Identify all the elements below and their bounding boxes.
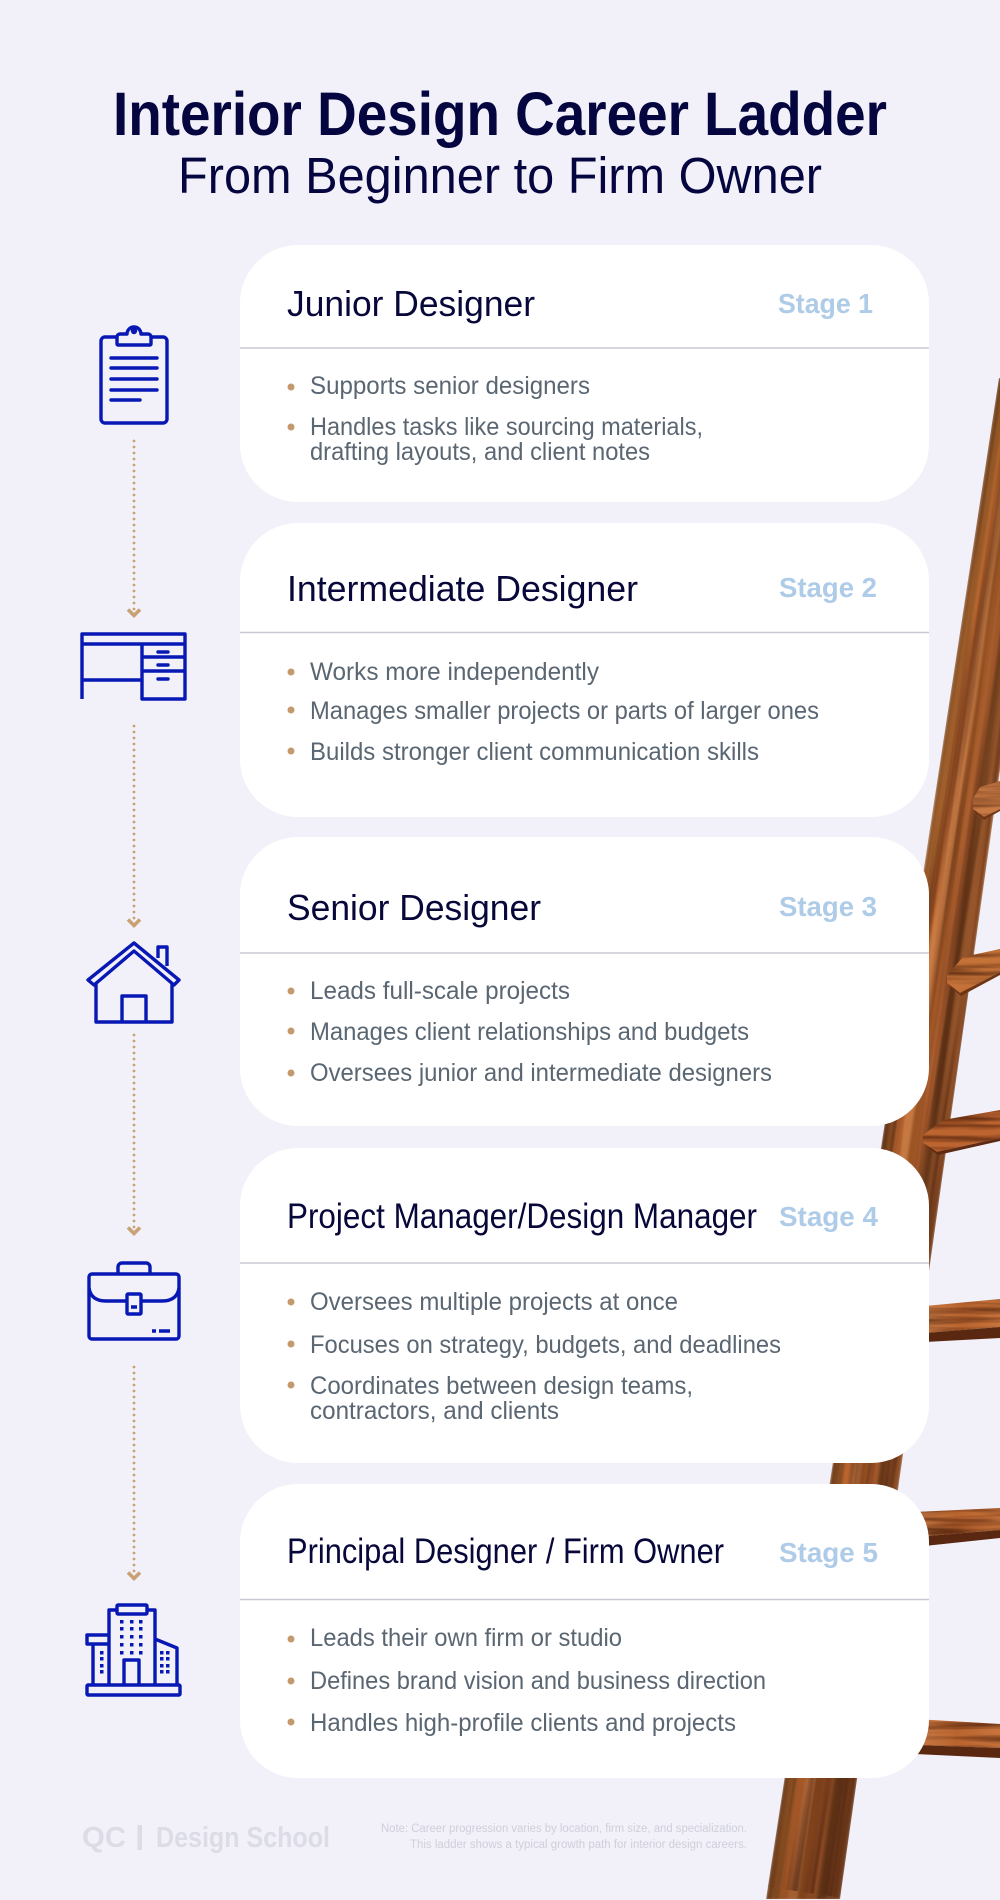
- bullet list: Manages client relationships and budgets: [310, 1018, 749, 1046]
- icon: briefcase: [89, 1263, 179, 1339]
- bullet list: Works more independently: [310, 658, 599, 686]
- title: [113, 80, 887, 204]
- bullet list: [288, 1288, 781, 1425]
- panel: stage 3 senior designer: [240, 837, 929, 1126]
- bullet list: drafting layouts, and client notes: [310, 438, 650, 466]
- bullet list: Handles tasks like sourcing materials,: [310, 413, 703, 441]
- bullet list: Coordinates between design teams,: [310, 1372, 693, 1400]
- panel: stage 5 principal designer: [240, 1484, 929, 1778]
- arrow: stage 2 to stage 3: [128, 726, 140, 926]
- bullet list: [288, 1624, 766, 1737]
- logo: QC Design School: [82, 1822, 330, 1854]
- panel: stage 4 project manager: [240, 1148, 929, 1463]
- card heading: Principal Designer / Firm Owner: [287, 1532, 724, 1571]
- stage label: Stage 2: [779, 572, 877, 603]
- arrow: stage 1 to stage 2: [128, 441, 140, 616]
- subheading: From Beginner to Firm Owner: [178, 147, 822, 204]
- bullet list: Leads their own firm or studio: [310, 1624, 622, 1652]
- main heading: Interior Design Career Ladder: [113, 80, 887, 148]
- bullet list: [288, 372, 703, 466]
- bullet list: [288, 977, 772, 1087]
- panel: stage 1 junior designer: [240, 245, 929, 502]
- stage label: Stage 4: [779, 1201, 879, 1232]
- bullet list: Leads full-scale projects: [310, 977, 570, 1005]
- bullet list: Oversees junior and intermediate designers: [310, 1059, 772, 1087]
- ladder illustration: [766, 378, 1000, 1899]
- bullet list: contractors, and clients: [310, 1397, 559, 1425]
- icon: house: [88, 943, 179, 1022]
- bullet list: Oversees multiple projects at once: [310, 1288, 678, 1316]
- card heading: Project Manager/Design Manager: [287, 1197, 757, 1236]
- panel: stage 2 intermediate designer: [240, 523, 929, 817]
- bullet list: Focuses on strategy, budgets, and deadlines: [310, 1331, 781, 1359]
- stage label: Stage 1: [778, 288, 873, 319]
- card heading: Intermediate Designer: [287, 568, 638, 609]
- bullet list: Supports senior designers: [310, 372, 590, 400]
- icon: desk: [82, 634, 185, 699]
- bullet list: [288, 658, 819, 766]
- bullet list: Defines brand vision and business direction: [310, 1667, 766, 1695]
- stage label: Stage 3: [779, 891, 877, 922]
- icon: office building: [87, 1605, 180, 1695]
- logo: QC Design School: QC: [82, 1822, 126, 1854]
- card heading: Senior Designer: [287, 887, 541, 928]
- bullet list: Manages smaller projects or parts of larger ones: [310, 697, 819, 725]
- arrow: stage 4 to stage 5: [128, 1367, 140, 1578]
- stage label: Stage 5: [779, 1537, 878, 1568]
- bullet list: Handles high-profile clients and projects: [310, 1709, 736, 1737]
- footnote: [381, 1823, 747, 1851]
- arrow: stage 3 to stage 4: [128, 1035, 140, 1234]
- ladder rungs: [915, 781, 1000, 1758]
- logo: QC Design School: Design School: [156, 1822, 330, 1854]
- icon: clipboard: [101, 327, 167, 423]
- bullet list: Builds stronger client communication skills: [310, 738, 759, 766]
- card heading: Junior Designer: [287, 283, 535, 324]
- footnote: Note: Career progression varies by location, firm size, and specialization.: [381, 1823, 747, 1835]
- ladder rail: [766, 378, 1000, 1899]
- footnote: This ladder shows a typical growth path for interior design careers.: [410, 1839, 747, 1851]
